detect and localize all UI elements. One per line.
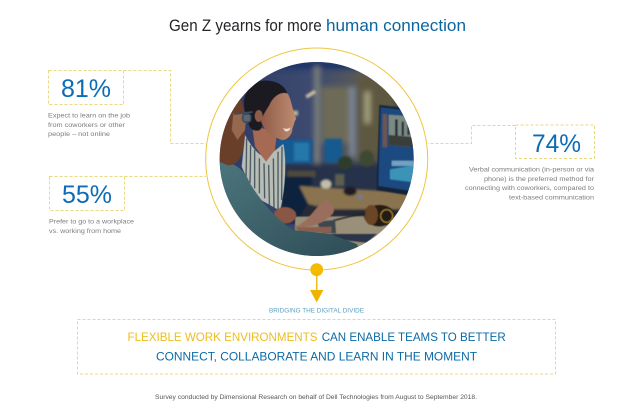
section label: BRIDGING THE DIGITAL DIVIDE — [269, 308, 365, 315]
arrow head — [310, 290, 323, 302]
callout: 55% stat — [49, 176, 206, 235]
takeaway text: CAN ENABLE TEAMS TO BETTER — [322, 330, 506, 344]
stat box: 74% — [516, 125, 594, 158]
title: human connection — [326, 17, 466, 35]
connector: 55% to circle — [124, 176, 206, 178]
number: 55%: 55% — [62, 181, 112, 209]
table — [299, 186, 413, 209]
woman's smile — [283, 127, 291, 131]
foreground desk — [294, 216, 395, 256]
number: 74%: 74% — [532, 130, 581, 158]
takeaway text: FLEXIBLE WORK ENVIRONMENTS — [128, 330, 318, 344]
description: 74%: text-based communication — [509, 194, 594, 202]
description: 55% — [49, 218, 134, 235]
panel: key takeaway — [78, 320, 556, 374]
man's glasses — [234, 112, 253, 122]
takeaway text: CONNECT, COLLABORATE AND LEARN IN THE MOMENT — [156, 350, 477, 364]
photo: two colleagues at a monitor — [217, 60, 417, 263]
woman's shirt — [242, 135, 285, 211]
description: 81%: people – not online — [48, 131, 110, 138]
callout: 81% stat — [48, 70, 206, 144]
takeaway text — [128, 330, 506, 364]
woman's neck — [252, 127, 277, 162]
lamp — [305, 90, 316, 99]
callout: 74% stat — [428, 125, 595, 202]
background wall — [217, 60, 417, 260]
number: 81%: 81% — [61, 75, 111, 103]
connector: 81% to circle — [124, 70, 206, 144]
stat box: 55% — [50, 176, 124, 210]
headphones — [333, 205, 395, 226]
woman's hair — [244, 81, 287, 131]
description: 74% — [465, 166, 595, 202]
yellow dot — [310, 263, 323, 276]
man's sweater — [217, 163, 367, 263]
monitor — [377, 105, 417, 197]
stat box: 81% — [48, 70, 124, 104]
dark floor under desk — [282, 177, 312, 223]
description: 81%: from coworkers or other — [48, 122, 126, 129]
description: 55%: Prefer to go to a workplace — [49, 218, 134, 226]
title — [169, 17, 466, 35]
hands — [274, 200, 334, 233]
description: 74%: connecting with coworkers, compared to — [465, 185, 594, 192]
description: 74%: Verbal communication (in-person or via — [469, 166, 594, 174]
description: 81%: Expect to learn on the job — [48, 112, 130, 120]
description: 55%: vs. working from home — [49, 228, 121, 235]
man's beard and head — [217, 96, 245, 165]
background monitors — [277, 139, 312, 163]
description: 81% — [48, 112, 130, 138]
woman's face — [261, 93, 296, 140]
plants — [338, 156, 352, 169]
title: Gen Z yearns for more — [169, 17, 322, 35]
arrow line — [316, 272, 317, 292]
connector: 74% to circle — [428, 126, 516, 144]
description: 74%: phone) is the preferred method for — [484, 176, 595, 183]
takeaway border — [78, 320, 556, 374]
outer yellow ring — [206, 48, 428, 270]
keyboard — [317, 220, 377, 243]
connector dot and arrow — [310, 263, 323, 302]
footnote: Survey conducted by Dimensional Research on behalf of Dell Technologies from August to September 2018. — [155, 394, 477, 401]
